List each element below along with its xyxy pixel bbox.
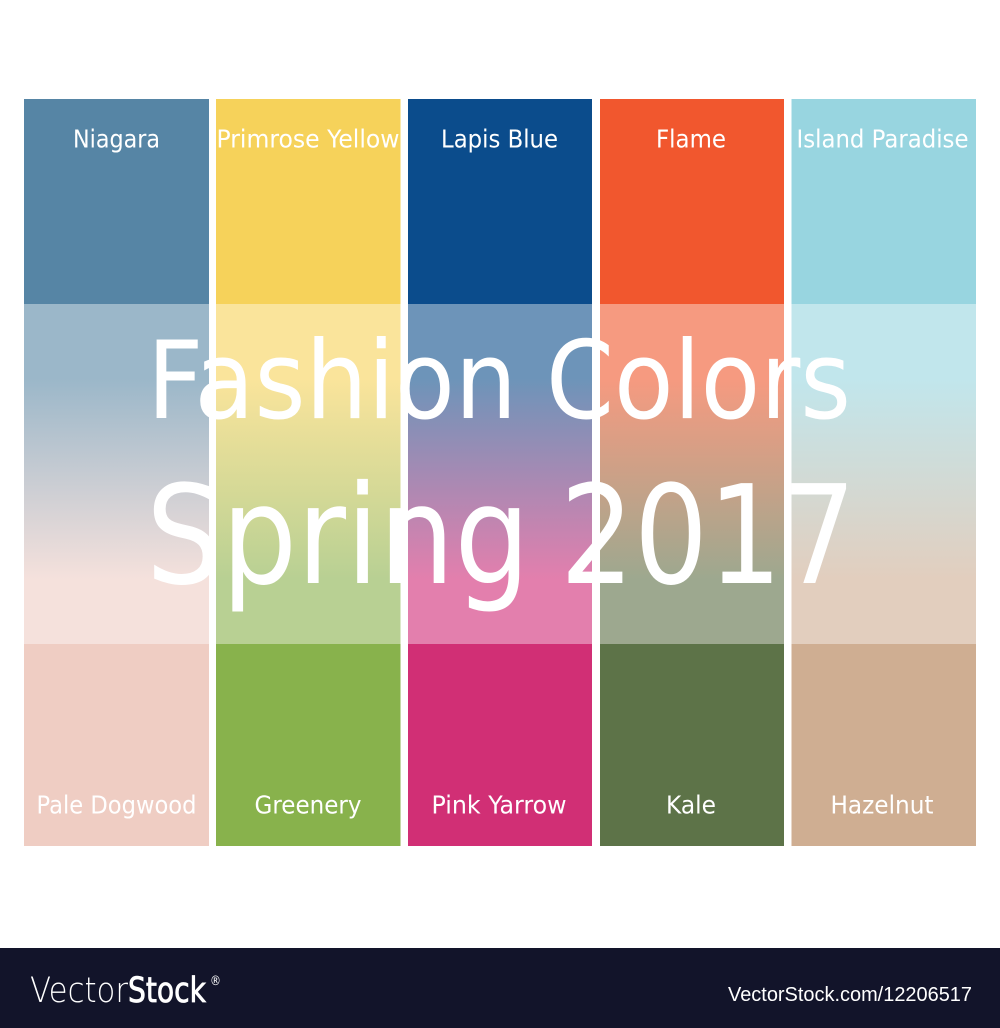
- panel: Island Paradise to Hazelnut column: [792, 99, 976, 846]
- logo: Vector: [30, 971, 129, 1011]
- panel: Primrose Yellow to Greenery column: [216, 99, 400, 846]
- panel: Primrose Yellow to Greenery column: Greenery: [254, 790, 362, 820]
- panel: Flame to Kale column: Flame: [656, 124, 726, 154]
- panel: Lapis Blue to Pink Yarrow column: Lapis Blue: [441, 124, 558, 154]
- title: Fashion: [147, 319, 517, 444]
- panel: Island Paradise to Hazelnut column: Island Paradise: [796, 124, 968, 154]
- logo: ®: [210, 974, 221, 989]
- footer bar: [0, 948, 1000, 1028]
- title: Colors: [546, 319, 851, 444]
- panel: Island Paradise to Hazelnut column: Hazelnut: [830, 790, 934, 820]
- title: Spring: [146, 457, 530, 616]
- logo: Stock: [128, 971, 207, 1011]
- panel: Flame to Kale column: [600, 99, 784, 846]
- title: 2017: [560, 457, 856, 616]
- logo: [30, 971, 221, 1011]
- panel: Niagara to Pale Dogwood column: Niagara: [73, 124, 160, 154]
- source url: VectorStock.com/12206517: [728, 984, 972, 1006]
- panel: Lapis Blue to Pink Yarrow column: Pink Yarrow: [432, 790, 566, 820]
- panel: Flame to Kale column: Kale: [666, 790, 716, 820]
- panel: Niagara to Pale Dogwood column: Pale Dogwood: [36, 790, 196, 820]
- panel: Niagara to Pale Dogwood column: [24, 99, 209, 846]
- title: [146, 319, 856, 616]
- panel: Lapis Blue to Pink Yarrow column: [408, 99, 592, 846]
- panel: Primrose Yellow to Greenery column: Primrose Yellow: [216, 124, 400, 154]
